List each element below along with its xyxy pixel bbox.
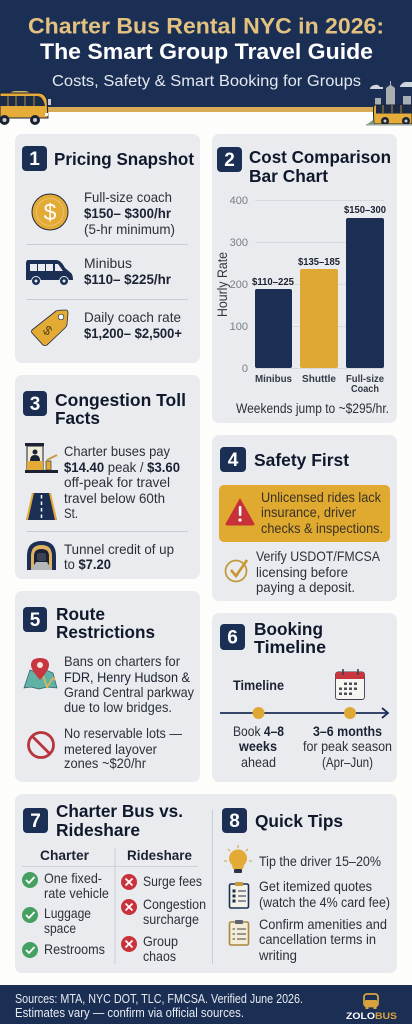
- text: itemized quotes: [259, 878, 390, 910]
- text: toll rates: St.: [64, 505, 78, 521]
- text: toll rates: Charter buses pay: [64, 443, 170, 459]
- text: layover: [64, 725, 182, 771]
- panel 1: pricing snapshot: [15, 134, 200, 363]
- icon: price tag: [32, 310, 68, 346]
- text: bans: due to low bridges.: [64, 699, 172, 715]
- icon: check circle: [226, 560, 247, 582]
- subtitle: Costs, Safety & Smart Booking for Groups: [52, 73, 361, 90]
- heading: congestion toll facts: [55, 390, 186, 428]
- text: tip the driver: Tip the driver 15–20%: [259, 853, 381, 869]
- panel 5: route restrictions: [15, 591, 200, 782]
- icon: clipboard notes: [230, 920, 248, 945]
- heading: route restrictions: Restrictions: [56, 622, 155, 642]
- text: book ahead: ahead: [241, 754, 276, 770]
- icon: minibus: [26, 260, 73, 286]
- bar: full-size coach: [346, 218, 384, 368]
- value labels: [252, 204, 386, 288]
- text: sources: [15, 991, 303, 1020]
- text: bans: [64, 653, 194, 715]
- title: The Smart Group Travel Guide: [40, 39, 373, 64]
- text: rideshare list: Congestion: [143, 896, 206, 912]
- text: layover: No reservable lots —: [64, 725, 182, 741]
- badge 3: [23, 391, 47, 416]
- text: peak season: for peak season: [303, 738, 392, 754]
- heading: charter bus vs rideshare: [56, 801, 183, 840]
- text: rideshare list: [143, 873, 206, 964]
- badge 6: 6: [227, 628, 238, 648]
- badge 1: 1: [29, 149, 40, 170]
- text: book ahead: [233, 723, 284, 770]
- bar chart: [215, 195, 386, 395]
- badge 5: 5: [30, 610, 41, 631]
- column headers: Rideshare: [127, 847, 192, 863]
- axis labels: [230, 195, 248, 375]
- text: full-size coach: (5-hr minimum): [84, 221, 175, 237]
- logo: zolobus: ZOLO BUS: [346, 1011, 397, 1022]
- icon: map pin: [24, 658, 57, 689]
- heading: charter bus vs rideshare: Charter Bus vs.: [56, 801, 183, 821]
- text: verify: Verify USDOT/FMCSA: [256, 548, 381, 564]
- text: confirm amenities: writing: [258, 947, 297, 963]
- panel 3: congestion toll facts: [15, 375, 200, 579]
- text: sources: Estimates vary — confirm via official sources.: [15, 1005, 244, 1020]
- text: confirm amenities: cancellation terms in: [259, 931, 376, 947]
- heading: quick tips: Quick Tips: [255, 811, 343, 831]
- text: charter list: rate vehicle: [44, 885, 109, 901]
- axis title: Hourly Rate: [215, 252, 230, 317]
- text: peak season: 3–6 months: [313, 723, 382, 739]
- text: book ahead: Book 4–8: [233, 723, 284, 739]
- text: toll rates: off-peak for travel: [64, 474, 170, 490]
- text: full-size coach: Full-size coach: [84, 189, 172, 205]
- value labels: $135–185: [298, 256, 340, 268]
- icon: warning triangle: [226, 499, 254, 525]
- panel 2: cost comparison bar chart: [212, 134, 397, 423]
- text: charter list: space: [44, 920, 76, 936]
- text: rideshare list: surcharge: [143, 911, 199, 927]
- text: toll rates: [64, 443, 180, 521]
- text: sources: Sources: MTA, NYC DOT, TLC, FMCSA. Verified June 2026.: [15, 991, 303, 1006]
- text: charter list: [44, 870, 109, 957]
- heading: booking timeline: [254, 619, 326, 657]
- badge 4: [220, 447, 246, 472]
- text: tunnel credit: [64, 541, 174, 572]
- text: verify: paying a deposit.: [256, 579, 355, 595]
- text: rideshare list: chaos: [143, 948, 176, 964]
- category labels: Full-size: [346, 373, 384, 385]
- badge 2: [217, 147, 242, 172]
- text: daily coach rate: Daily coach rate: [84, 309, 181, 325]
- heading: cost comparison bar chart: Bar Chart: [249, 166, 328, 186]
- text: full-size coach: [84, 189, 175, 237]
- text: charter list: One fixed-: [44, 870, 102, 886]
- column headers: Charter: [40, 847, 90, 863]
- value labels: $150–300: [344, 204, 386, 216]
- bar: shuttle: [300, 269, 338, 368]
- text: confirm amenities: [258, 916, 387, 963]
- text: minibus: Minibus: [84, 255, 132, 271]
- badge 7: 7: [30, 811, 41, 832]
- text: tunnel credit: to $7.20: [64, 556, 111, 572]
- badge 3: 3: [30, 394, 40, 415]
- badge 1: [22, 146, 47, 171]
- icons: green checks: [22, 872, 38, 958]
- badge 4: 4: [228, 450, 239, 471]
- panel 7 and 8: comparison and quick tips: [15, 794, 397, 973]
- text: rideshare list: Group: [143, 933, 178, 949]
- text: toll rates: travel below 60th: [64, 490, 165, 506]
- panel 4: safety first: [212, 435, 397, 601]
- text: bans: Grand Central parkway: [64, 684, 194, 700]
- text: tunnel credit: Tunnel credit of up: [64, 541, 174, 557]
- logo: zolobus: [346, 994, 397, 1022]
- title: [28, 14, 384, 64]
- text: charter list: Restrooms: [44, 941, 105, 957]
- heading: congestion toll facts: Facts: [55, 408, 100, 428]
- category labels: Minibus: [255, 373, 292, 385]
- panel 6: booking timeline: [212, 613, 397, 782]
- heading: booking timeline: Timeline: [254, 637, 326, 657]
- text: bans: Bans on charters for: [64, 653, 180, 669]
- text: itemized quotes: (watch the 4% card fee): [259, 894, 390, 910]
- text: verify: licensing before: [256, 564, 348, 580]
- icon: light bulb: [224, 845, 252, 873]
- category labels: Coach: [351, 383, 379, 395]
- heading: cost comparison bar chart: [249, 147, 391, 186]
- category labels: Shuttle: [302, 373, 336, 385]
- bar: minibus: [255, 289, 292, 368]
- axis labels: 0: [242, 363, 248, 375]
- badge 7: [23, 808, 48, 833]
- text: bans: FDR, Henry Hudson &: [64, 669, 191, 685]
- text: charter list: Luggage: [44, 905, 91, 921]
- column headers: [40, 847, 192, 863]
- text: full-size coach: $150– $300/hr: [84, 205, 172, 221]
- badge 6: [220, 624, 245, 650]
- text: rideshare list: Surge fees: [143, 873, 202, 889]
- text: warning: [261, 489, 383, 536]
- text: warning: insurance, driver: [261, 504, 356, 520]
- title: Charter Bus Rental NYC in 2026:: [28, 14, 384, 38]
- value labels: $110–225: [252, 276, 294, 288]
- heading: safety first: Safety First: [254, 450, 349, 470]
- axis labels: 300: [230, 237, 248, 249]
- heading: congestion toll facts: Congestion Toll: [55, 390, 186, 410]
- arrow: timeline: [220, 707, 388, 719]
- note: weekends: Weekends jump to ~$295/hr.: [236, 401, 389, 416]
- icon: right bus and skyline: [366, 81, 412, 126]
- icon: left bus: [0, 91, 51, 125]
- text: confirm amenities: Confirm amenities and: [259, 916, 387, 932]
- text: daily coach rate: [84, 309, 182, 341]
- icon: road: [26, 493, 57, 520]
- text: daily coach rate: $1,200– $2,500+: [84, 325, 182, 341]
- badge 8: 8: [229, 811, 240, 832]
- axis labels: 400: [230, 195, 248, 207]
- icon: calendar: [336, 669, 364, 700]
- heading: cost comparison bar chart: Cost Comparison: [249, 147, 391, 167]
- text: warning: checks & inspections.: [261, 520, 383, 536]
- text: minibus: [84, 255, 172, 287]
- label: timeline: Timeline: [233, 677, 284, 693]
- header banner: [0, 0, 412, 126]
- callout: warning: [219, 485, 390, 542]
- text: book ahead: weeks: [238, 738, 277, 754]
- text: itemized quotes: Get itemized quotes: [259, 878, 372, 894]
- heading: route restrictions: [56, 604, 155, 642]
- heading: booking timeline: Booking: [254, 619, 323, 639]
- icon: no entry: [28, 732, 54, 758]
- icon: clipboard checklist: [230, 882, 248, 908]
- icon: toll booth: [25, 443, 58, 473]
- icons: red crosses: [121, 874, 137, 952]
- text: layover: metered layover: [64, 741, 157, 757]
- heading: route restrictions: Route: [56, 604, 105, 624]
- category labels: [255, 373, 384, 395]
- icon: tunnel: [27, 541, 56, 570]
- badge 8: [222, 808, 247, 833]
- text: toll rates: $14.40 peak / $3.60: [64, 459, 180, 475]
- axis labels: 200: [230, 279, 248, 291]
- heading: charter bus vs rideshare: Rideshare: [56, 820, 140, 840]
- text: layover: zones ~$20/hr: [64, 755, 146, 771]
- footer: [0, 985, 412, 1024]
- text: minibus: $110– $225/hr: [84, 271, 172, 287]
- icon: dollar coin: [32, 194, 68, 230]
- text: peak season: [303, 723, 392, 770]
- axis labels: 100: [230, 321, 248, 333]
- text: warning: Unlicensed rides lack: [261, 489, 382, 505]
- badge 5: [23, 607, 47, 632]
- heading: pricing snapshot: Pricing Snapshot: [54, 149, 194, 169]
- badge 2: 2: [224, 150, 235, 171]
- icon: price tag: $: [40, 322, 56, 339]
- icon: dollar coin: $: [44, 199, 57, 225]
- text: verify: [256, 548, 381, 595]
- text: peak season: (Apr–Jun): [322, 754, 373, 770]
